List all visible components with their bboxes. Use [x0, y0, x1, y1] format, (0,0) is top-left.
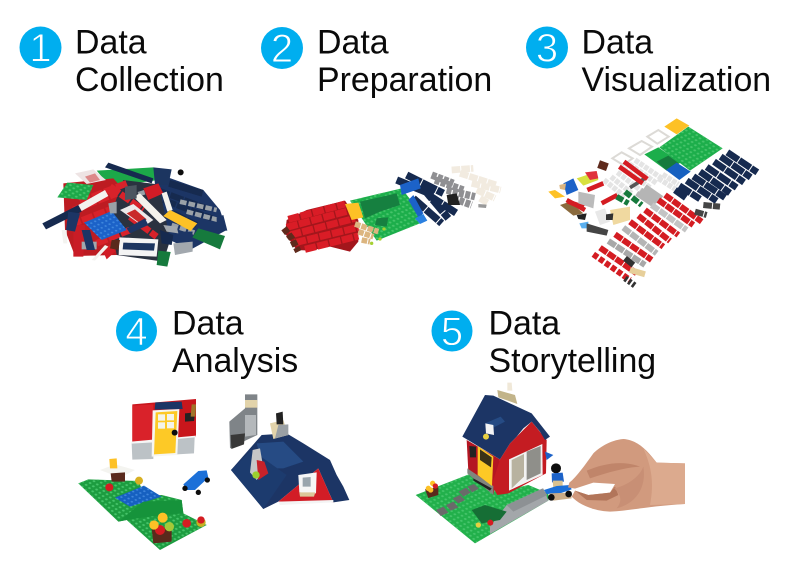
step 2 heading: Preparation: [317, 61, 492, 99]
minifigure on skateboard: [544, 463, 572, 501]
illustration: pile of mixed bricks: [42, 163, 227, 267]
step 4 heading: Analysis: [172, 342, 298, 380]
step 5 heading: 5: [441, 310, 463, 354]
step 2 heading: 2: [271, 27, 293, 71]
step 3 heading: 3: [536, 26, 558, 70]
step 2 heading: [261, 24, 492, 99]
step 4 heading: [116, 304, 298, 380]
step 1 heading: 1: [29, 26, 52, 70]
garden plate with stream: [78, 458, 207, 550]
step 4 heading: 4: [125, 310, 148, 354]
step 5 heading: Data: [488, 304, 560, 342]
step 3 heading: [526, 24, 771, 99]
step 1 heading: Data: [75, 24, 147, 62]
small green, dark green and blue plates: [644, 147, 691, 180]
yellow door piece: [664, 118, 689, 134]
illustration: bricks sorted by colour: [284, 168, 501, 252]
step 5 heading: [432, 304, 656, 380]
illustration: finished house with hand and minifigure: [416, 383, 685, 543]
green baseplate: [416, 473, 548, 543]
step 4 heading: Data: [172, 304, 244, 342]
step 1 heading: [20, 24, 224, 99]
step 3 heading: Visualization: [582, 61, 771, 99]
red brick rows upper: [567, 162, 647, 210]
white and grey bricks: [604, 160, 678, 205]
small parts group: [548, 160, 630, 236]
house: [462, 383, 553, 495]
wall with yellow door: [131, 399, 196, 460]
chimney: [229, 394, 257, 449]
step 2 heading: Data: [317, 24, 389, 62]
white window frames: [612, 130, 669, 165]
red and grey brick field: [593, 195, 720, 286]
step 3 heading: Data: [582, 24, 653, 62]
step 1 heading: Collection: [75, 61, 224, 99]
step 5 heading: Storytelling: [488, 342, 656, 380]
green bricks: [617, 192, 642, 205]
illustration: flat layout of bricks by type: [548, 118, 757, 286]
navy bricks: [675, 152, 757, 201]
large green plate: [659, 127, 723, 171]
roof and red house: [231, 412, 349, 509]
illustration: assembled lego sub-parts: [78, 394, 349, 550]
hand: [568, 439, 685, 512]
blue skateboard: [182, 470, 210, 495]
